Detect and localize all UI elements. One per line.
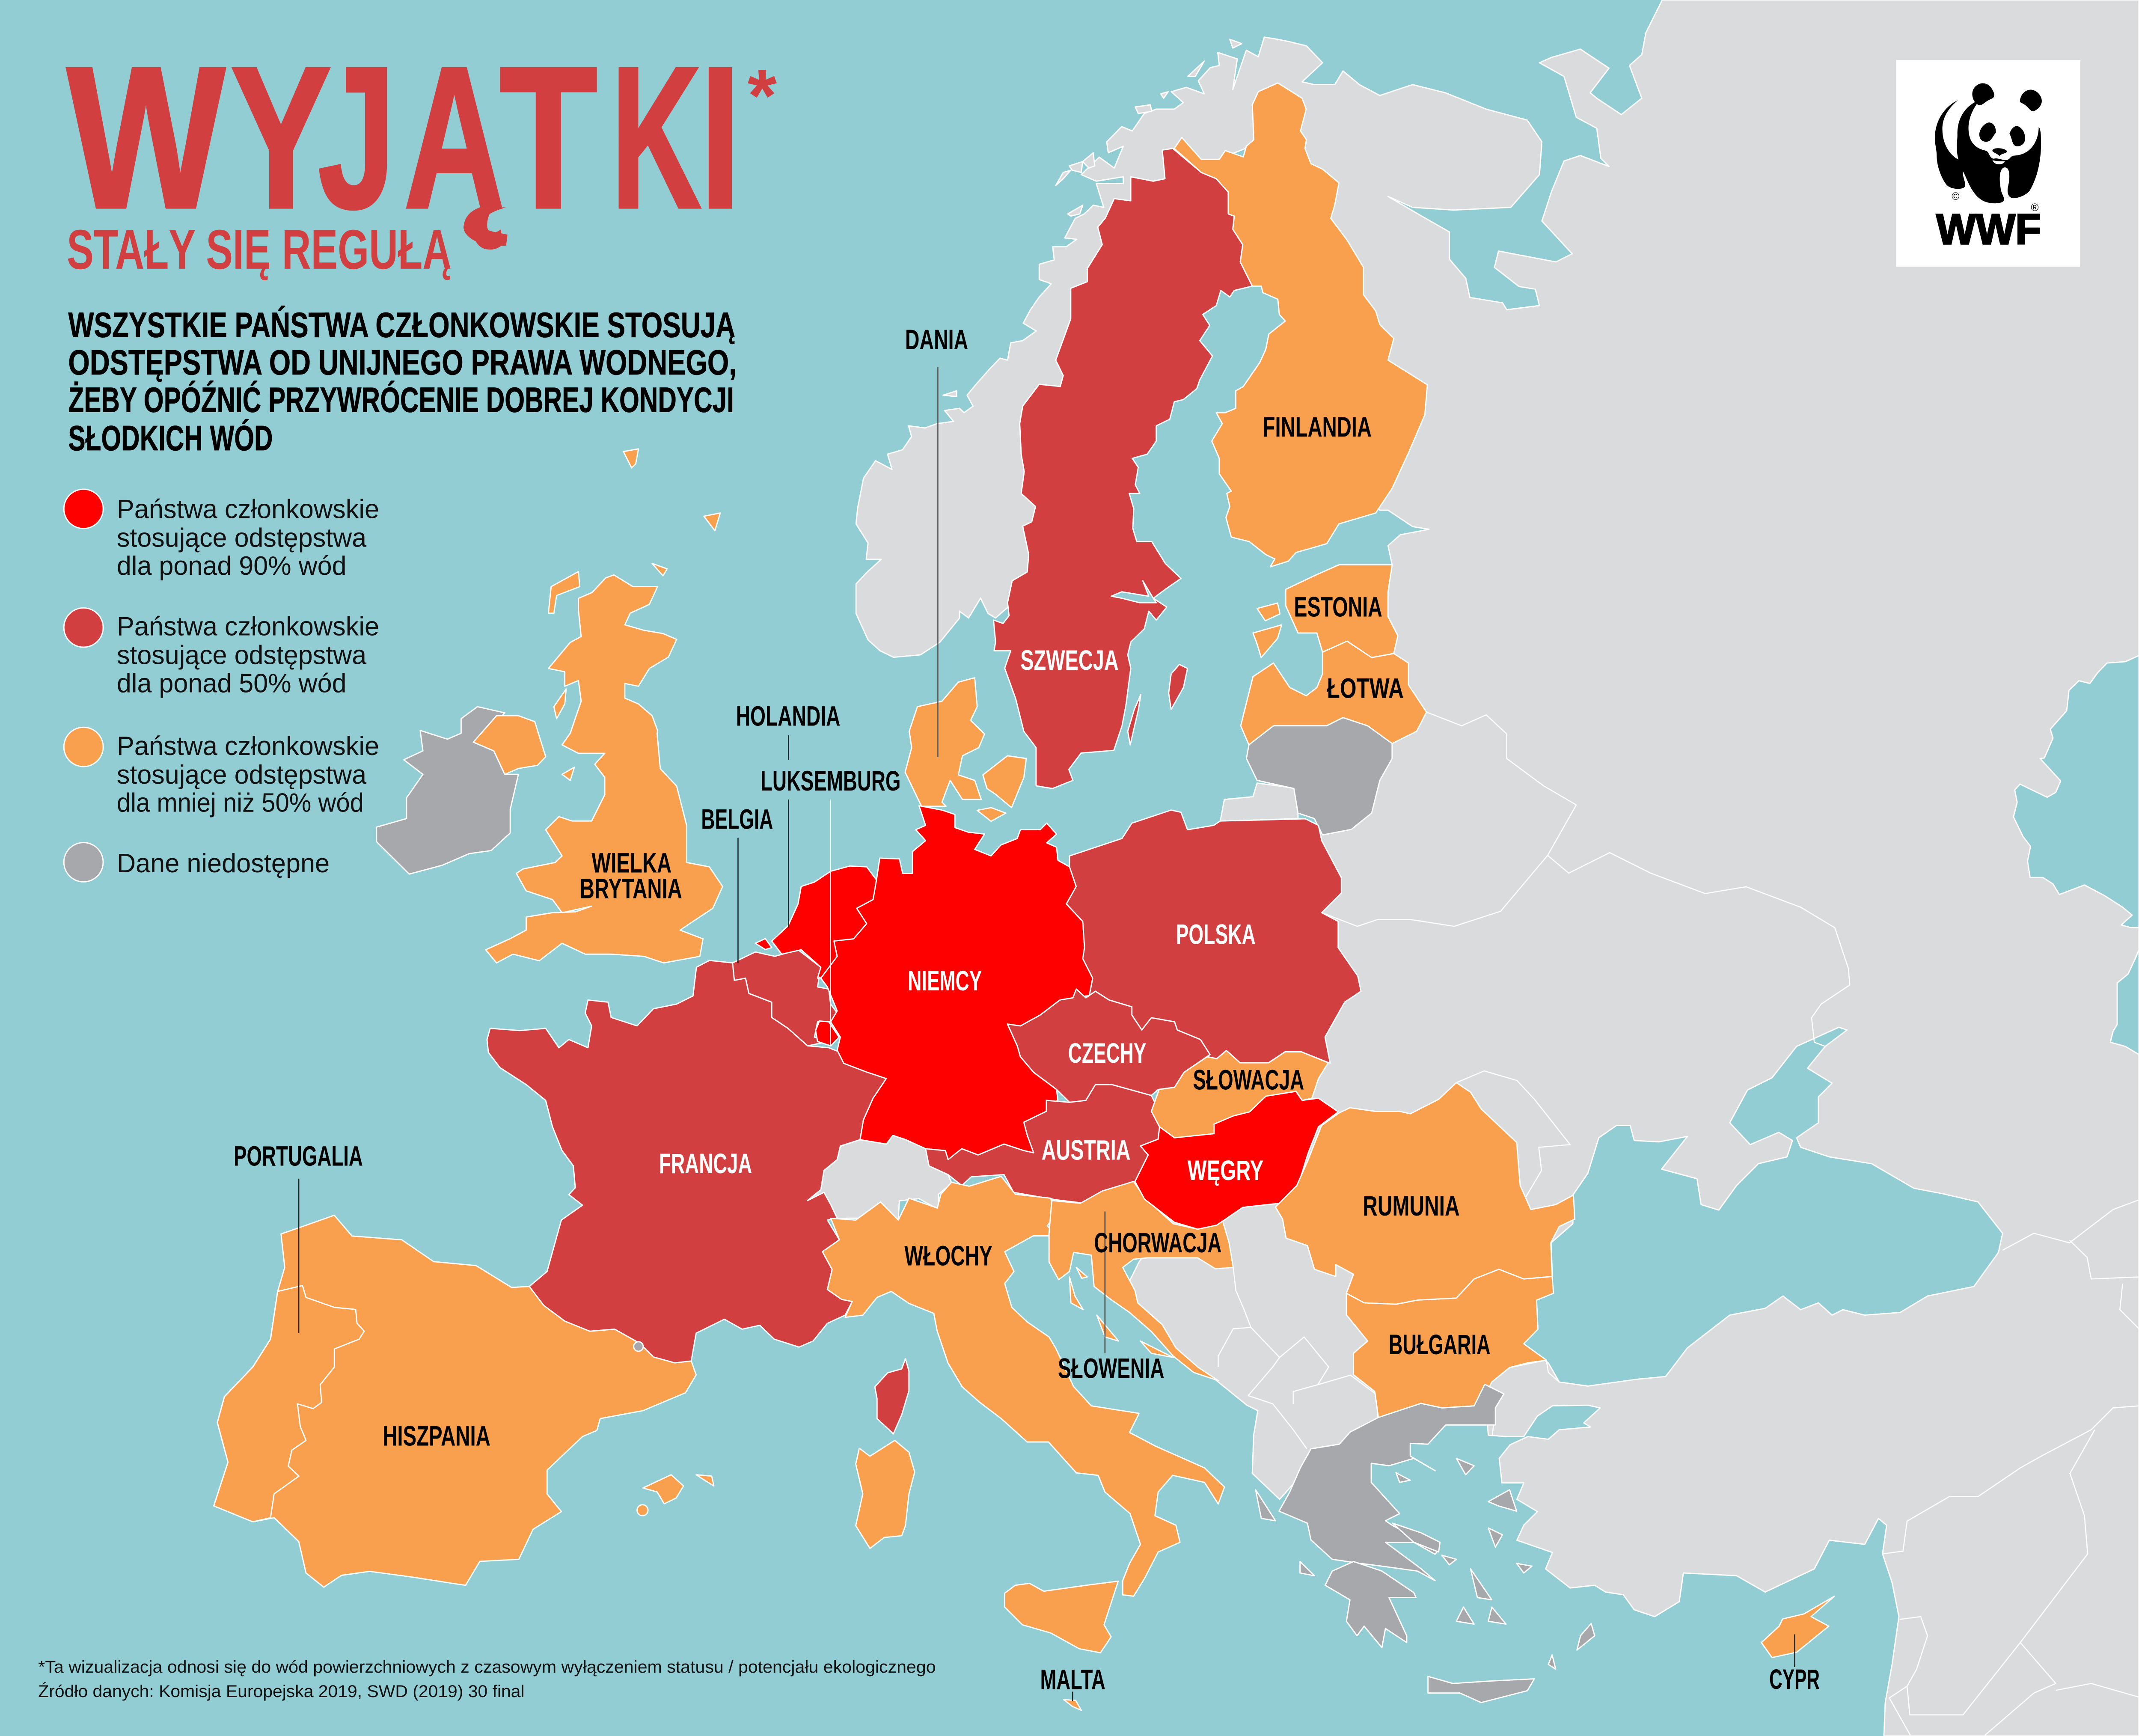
legend item: above 90%: dla ponad 90% wód [117,551,347,581]
country labels: LUKSEMBURG [761,765,900,797]
country labels: BELGIA [701,803,773,835]
WWF logo [1896,60,2080,267]
country labels: WIELKA [591,847,671,879]
legend item: above 50%: stosujące odstępstwa [117,641,367,670]
heading text block: ŻEBY OPÓŹNIĆ PRZYWRÓCENIE DOBREJ KONDYCJI [68,380,734,420]
country: United Kingdom [473,449,722,963]
country labels: WĘGRY [1188,1154,1263,1186]
footnote [38,1657,936,1701]
title [67,24,777,250]
title: J [318,24,395,250]
country: Malta [1064,1700,1081,1710]
country labels: DANIA [905,324,968,355]
title: W [67,24,227,250]
country: Bulgaria [1346,1269,1554,1418]
country: Ireland [377,707,518,874]
country labels: MALTA [1040,1664,1105,1695]
country: Croatia and Slovenia [1049,1181,1233,1381]
country labels: CYPR [1769,1663,1820,1695]
country labels: CZECHY [1068,1037,1146,1069]
country: Czechia [1007,989,1210,1102]
country: Hungary [1135,1091,1338,1229]
legend item: above 90% [64,489,379,581]
icon: panda: WWF [1936,206,2041,253]
country labels: FINLANDIA [1263,411,1372,443]
country: Italy [823,1177,1224,1653]
country labels: POLSKA [1176,919,1256,950]
legend item: no data: Dane niedostępne [117,849,330,878]
Caspian Sea [2014,656,2139,1055]
country: Slovakia [1151,1050,1328,1138]
country labels: SŁOWACJA [1193,1064,1304,1095]
country labels: HOLANDIA [736,700,841,732]
legend [64,489,379,882]
heading text block: SŁODKICH WÓD [68,418,273,458]
footnote: Źródło danych: Komisja Europejska 2019, SWD (2019) 30 final [38,1682,525,1701]
country: Austria [926,1085,1159,1203]
country: Cyprus [1762,1596,1835,1658]
borders between unlabelled countries [1218,712,2139,1735]
country labels: AUSTRIA [1042,1134,1130,1165]
legend item: above 50% [64,608,379,698]
icon: panda [1935,83,2042,253]
subtitle: STAŁY SIĘ REGUŁĄ [67,218,452,281]
land: non-EU and unlabelled countries [856,0,2139,1736]
country labels: HISZPANIA [383,1420,490,1451]
heading text block: ODSTĘPSTWA OD UNIJNEGO PRAWA WODNEGO, [68,342,737,382]
country: Germany [821,806,1093,1159]
country: Luxembourg [816,1021,839,1046]
country: Sweden [993,149,1252,788]
title: T [499,24,597,250]
country labels: BUŁGARIA [1389,1329,1491,1360]
legend item: below 50% [64,727,379,818]
country labels: PORTUGALIA [234,1140,363,1171]
icon: panda: © [1952,191,1959,202]
country: Netherlands [755,866,876,978]
country labels: WŁOCHY [904,1240,992,1272]
legend item: below 50%: dla mniej niż 50% wód [117,788,364,818]
country labels: RUMUNIA [1363,1190,1460,1222]
country: Romania [1275,1083,1575,1304]
country labels: FRANCJA [659,1147,752,1179]
legend item: above 90%: stosujące odstępstwa [117,523,367,553]
country labels: BRYTANIA [580,873,682,904]
legend item: above 50%: Państwa członkowskie [117,612,379,641]
country: Spain [214,1215,714,1587]
heading text block [68,305,737,458]
country labels [234,324,1820,1695]
country: Andorra [634,1342,643,1351]
country: Portugal [214,1286,364,1522]
legend item: below 50%: Państwa członkowskie [117,731,379,761]
legend item: above 90%: Państwa członkowskie [117,494,379,524]
title: K [611,24,701,250]
country labels: SZWECJA [1020,644,1119,676]
title: I [700,24,741,250]
heading text block: WSZYSTKIE PAŃSTWA CZŁONKOWSKIE STOSUJĄ [68,305,735,345]
country: France [487,960,909,1434]
country labels: ŁOTWA [1327,672,1404,704]
country: Denmark [905,678,1026,821]
country: Belgium [733,950,837,1046]
title: Ą [404,24,505,250]
country labels: SŁOWENIA [1058,1352,1165,1384]
country: Poland [1067,810,1361,1063]
legend item: above 50%: dla ponad 50% wód [117,669,347,698]
country: Estonia [1253,565,1398,657]
country: Switzerland [806,1136,952,1220]
title: Y [231,24,332,250]
legend item: below 50%: stosujące odstępstwa [117,760,367,790]
footnote: *Ta wizualizacja odnosi się do wód powierzchniowych z czasowym wyłączeniem statusu / potencjału ekologicznego [38,1657,936,1677]
country: Finland [1174,83,1427,567]
icon: panda: ® [2031,202,2039,214]
country: Latvia [1241,641,1426,745]
Black Sea and Sea of Azov [1524,1027,2002,1386]
leader lines [299,367,1794,1701]
title: * [748,54,777,138]
country: Lithuania [1246,718,1392,835]
country: Greece [1256,1384,1595,1703]
country labels: NIEMCY [908,965,982,996]
country labels: ESTONIA [1294,591,1382,623]
legend item: no data [64,843,330,882]
country labels: CHORWACJA [1094,1227,1221,1258]
